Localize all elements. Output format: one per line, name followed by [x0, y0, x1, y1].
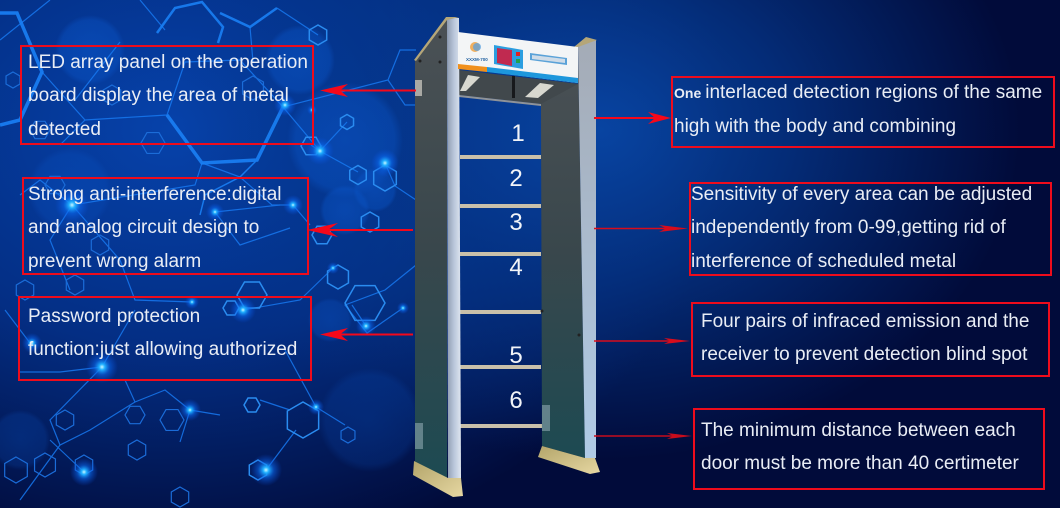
callout: password protection	[18, 296, 312, 381]
callout: anti-interference: and analog circuit design to	[28, 217, 259, 238]
arrow: to sensitivity callout	[594, 225, 688, 232]
zone numbers: 5	[509, 342, 523, 369]
callout: infrared emission	[691, 302, 1050, 377]
callout: LED array panel: board display the area of metal	[28, 85, 289, 106]
callout: password protection: function:just allowing authorized	[28, 339, 297, 360]
arrow: to infrared callout	[594, 338, 690, 344]
zone numbers: 1	[511, 120, 525, 147]
zone numbers: 4	[509, 254, 523, 281]
callout: detection regions: high with the body and combining	[674, 116, 956, 137]
callout: sensitivity	[689, 182, 1052, 276]
callout: anti-interference: Strong anti-interference:digital	[28, 184, 281, 205]
arrow: to LED panel callout	[320, 84, 416, 97]
crossbars	[460, 155, 543, 428]
arrow: to detection regions callout	[594, 112, 671, 124]
callout: LED array panel: detected	[28, 119, 101, 140]
callout: minimum distance	[693, 408, 1045, 490]
callout: sensitivity: Sensitivity of every area can be adjusted	[691, 184, 1032, 205]
arrow: to minimum distance callout	[594, 433, 692, 439]
callout: infrared emission: Four pairs of infraced emission and the	[701, 311, 1029, 332]
callout: sensitivity: independently from 0-99,getting rid of	[691, 217, 1006, 238]
zone numbers: 6	[509, 387, 523, 414]
header control panel: XXXM-700	[466, 57, 488, 62]
left column	[413, 17, 463, 497]
callout: anti-interference: prevent wrong alarm	[28, 251, 201, 272]
callout: password protection: Password protection	[28, 306, 200, 327]
callout: minimum distance: The minimum distance between each	[701, 420, 1016, 441]
callout: infrared emission: receiver to prevent detection blind spot	[701, 344, 1027, 365]
callout: detection regions	[671, 76, 1055, 148]
callout: minimum distance: door must be more than 40 certimeter	[701, 453, 1019, 474]
callout: LED array panel	[20, 45, 314, 145]
callout: sensitivity: interference of scheduled metal	[691, 251, 956, 272]
callout: LED array panel: LED array panel on the operation	[28, 52, 308, 73]
arrow: to password callout	[320, 328, 413, 341]
zone numbers: 2	[509, 165, 523, 192]
zone numbers	[509, 120, 525, 414]
callout: anti-interference	[22, 177, 309, 275]
right column	[538, 37, 600, 474]
underside of header	[459, 70, 580, 104]
zone numbers: 3	[509, 209, 523, 236]
header control panel	[458, 32, 578, 83]
arrow: to anti-interference callout	[307, 223, 413, 237]
callout: detection regions: Oneinterlaced detection regions of the same	[674, 82, 1042, 103]
